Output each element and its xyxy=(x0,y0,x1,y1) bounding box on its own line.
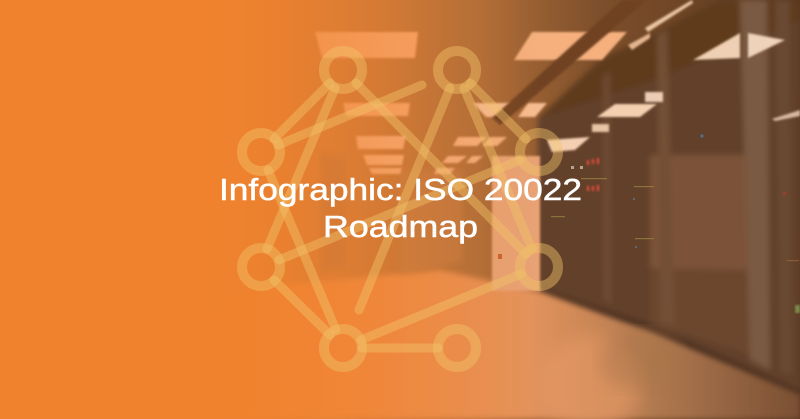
rack lights xyxy=(587,158,599,191)
ceiling lights xyxy=(315,0,800,174)
corridor floor xyxy=(200,270,800,419)
title: Infographic: ISO 20022 xyxy=(219,172,582,207)
network icon xyxy=(242,51,558,367)
network nodes xyxy=(242,51,558,367)
network connections xyxy=(267,83,532,348)
left racks xyxy=(320,150,345,275)
title xyxy=(219,172,582,244)
server racks xyxy=(538,0,800,397)
title: Roadmap xyxy=(323,209,478,244)
bright rack end panel xyxy=(492,156,540,291)
overhead beam xyxy=(492,0,647,125)
